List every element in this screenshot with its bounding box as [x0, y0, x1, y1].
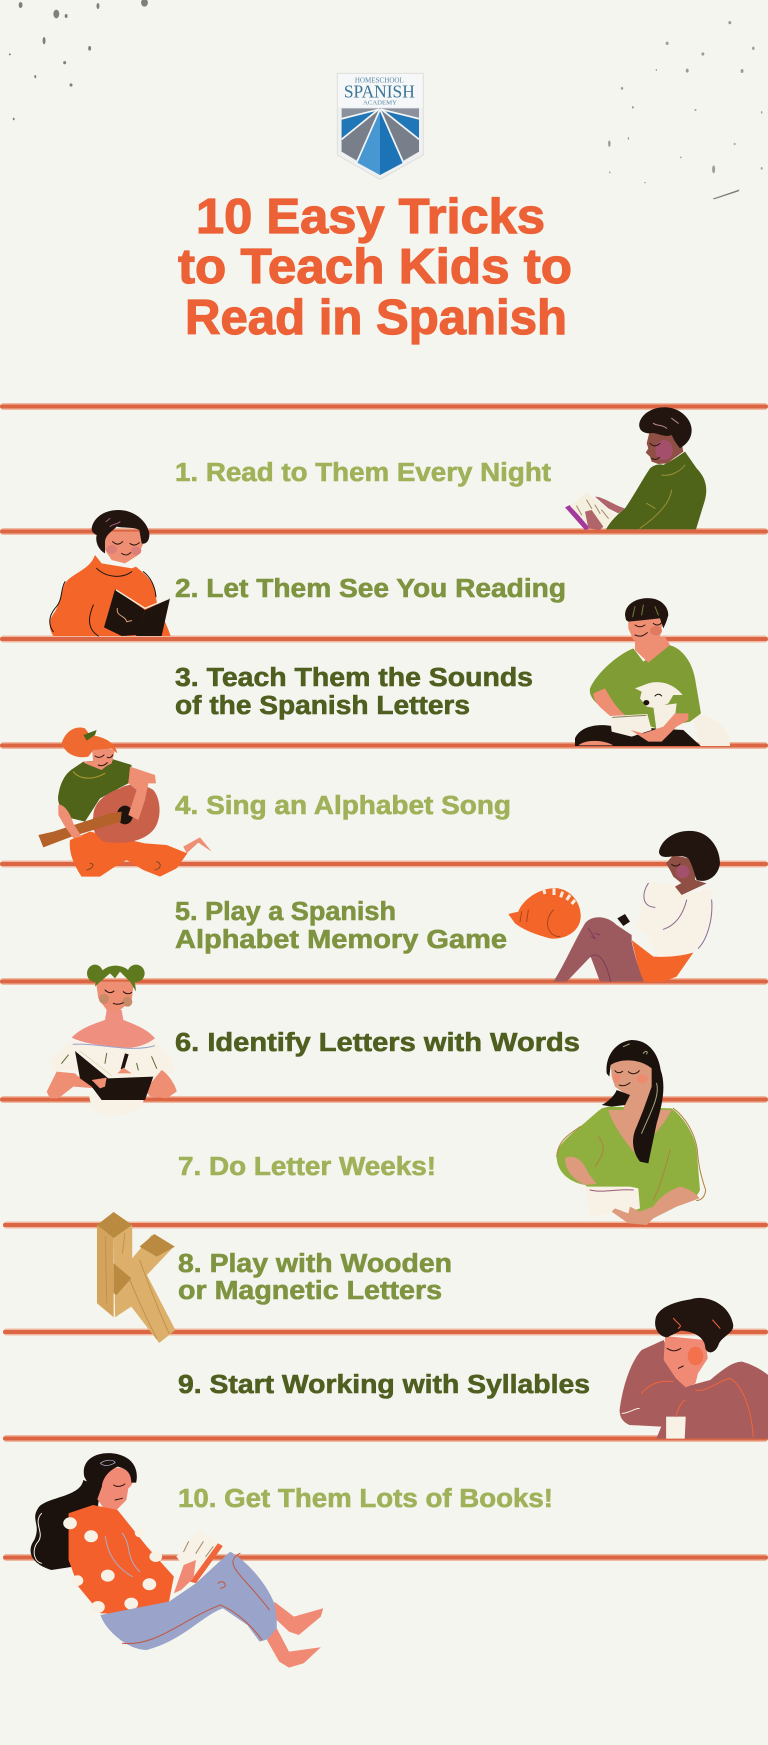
tip 9 text: 9. Start Working with Syllables [178, 1371, 590, 1399]
illustration: woman in orange sweater reading [50, 510, 171, 636]
illustration: man reading a book [565, 407, 706, 530]
decorative speckles [9, 0, 763, 199]
logo: Homeschool Spanish Academy shield: HOMESCHOOL [355, 76, 404, 84]
tip 6 text: 6. Identify Letters with Words [175, 1029, 580, 1057]
logo: Homeschool Spanish Academy shield: ACADEMY [363, 100, 398, 106]
tip 5 text [175, 898, 507, 954]
tip 3 text [175, 664, 533, 720]
panel: tip 6 [47, 965, 580, 1116]
title [178, 190, 572, 345]
tip 8 text: or Magnetic Letters [178, 1277, 442, 1305]
tip 7 text: 7. Do Letter Weeks! [178, 1153, 436, 1181]
logo: Homeschool Spanish Academy shield: SPANISH [344, 82, 415, 102]
panel: tip 8 [97, 1212, 452, 1343]
illustration: sitting woman with orange cat [508, 831, 720, 982]
tip 5 text: Alphabet Memory Game [175, 926, 507, 954]
panel: tip 2 [50, 510, 566, 636]
illustration: woman with green hair buns writing in a notebook [47, 965, 177, 1116]
tip 10 text: 10. Get Them Lots of Books! [178, 1485, 553, 1513]
title: to Teach Kids to [178, 240, 572, 294]
illustration: woman reclining with a book [31, 1453, 323, 1668]
illustration: woman with long dark hair reading [557, 1040, 706, 1225]
tip 3 text: of the Spanish Letters [175, 692, 470, 720]
logo: Homeschool Spanish Academy shield [337, 73, 423, 179]
panel: tip 7 [178, 1040, 706, 1225]
tip 2 text: 2. Let Them See You Reading [175, 575, 566, 603]
tip 8 text: 8. Play with Wooden [178, 1250, 452, 1278]
illustration: person leaning head on hand [620, 1298, 768, 1439]
panel: tip 9 [178, 1298, 768, 1439]
tip 4 text: 4. Sing an Alphabet Song [175, 792, 511, 820]
tip 8 text [178, 1250, 452, 1305]
panel: tip 3 [175, 598, 730, 746]
panel: tip 5 [175, 831, 720, 982]
title: Read in Spanish [185, 291, 567, 345]
panel: tip 1 [175, 407, 706, 530]
title: 10 Easy Tricks [196, 190, 545, 244]
tip 5 text: 5. Play a Spanish [175, 898, 396, 926]
tip 3 text: 3. Teach Them the Sounds [175, 664, 533, 692]
illustration: wooden letter K [97, 1212, 175, 1343]
tip 1 text: 1. Read to Them Every Night [175, 459, 552, 487]
panel: tip 10 [31, 1453, 553, 1668]
illustration: girl playing guitar [38, 727, 212, 877]
panel: tip 4 [38, 727, 511, 877]
illustration: woman reading with a white dog [575, 598, 730, 746]
